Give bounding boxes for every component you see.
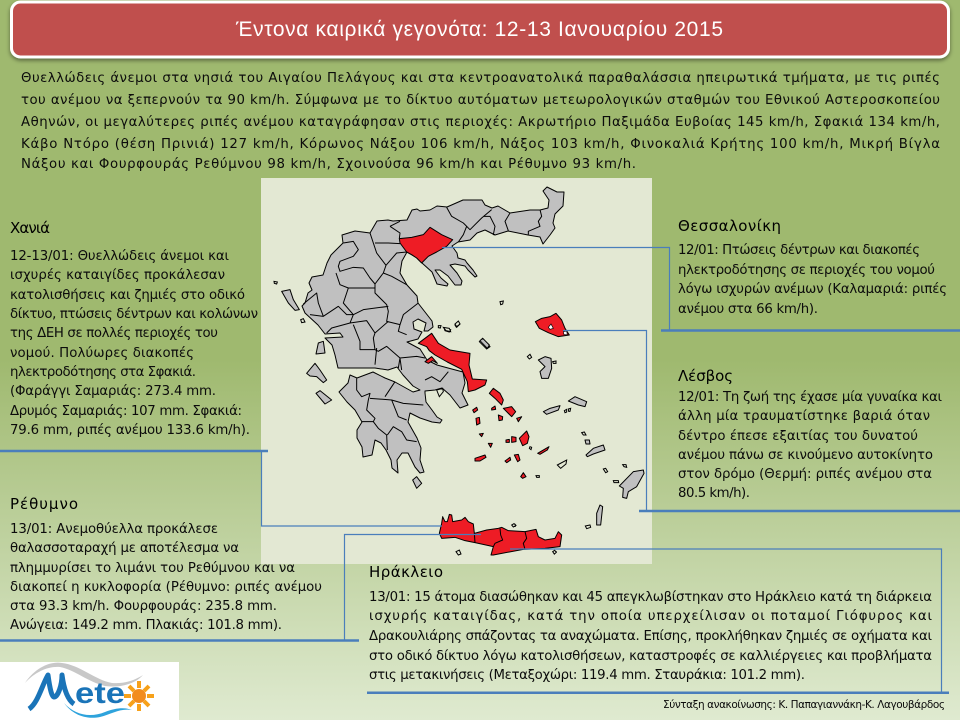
- text block: Chania: Χανιά: [10, 219, 50, 237]
- text block: Chania: δίκτυο, πτώσεις δέντρων και κολώνων: [10, 306, 258, 322]
- text block: Heraklion: Ηράκλειο: [369, 563, 443, 581]
- text block: Thessaloniki: [678, 217, 947, 317]
- map of Greece with affected prefectures in red: [274, 187, 644, 555]
- text block: Lesvos: στον δρόμο (Θερμή: ριπές ανέμου στα: [678, 466, 932, 482]
- prefecture borders north and central: [303, 221, 425, 368]
- map panel background: [261, 178, 652, 564]
- text block: Heraklion: στο οδικό δίκτυο λόγω κατολισθήσεων, καταστροφές σε καλλιέργειες και προβλήματα: [369, 648, 932, 664]
- text block: Thessaloniki: λόγω ισχυρών ανέμων (Καλαμαριά: ριπές: [678, 281, 947, 297]
- connector: Chania: [0, 451, 442, 526]
- text block: Heraklion: στις μετακινήσεις (Μεταξοχώρι: 119.4 mm. Σταυράκια: 101.2 mm).: [369, 667, 805, 683]
- Aegean gray islands: [455, 301, 644, 554]
- connector: Rethymno: [0, 534, 481, 640]
- intro text block: Νάξου και Φουρφουράς Ρεθύμνου 98 km/h, Σχοινούσα 96 km/h και Ρέθυμνο 93 km/h.: [21, 156, 636, 172]
- text block: Chania: της ΔΕΗ σε πολλές περιοχές του: [10, 325, 218, 341]
- Peloponnese borders: [357, 378, 423, 450]
- Crete red: [439, 514, 562, 555]
- title banner: [12, 2, 948, 57]
- text block: Lesvos: άλλη μία τραυματίστηκε βαριά όταν: [678, 408, 930, 424]
- text block: Rethymno: [10, 495, 322, 633]
- white gulfs and small islets: [437, 322, 490, 397]
- Ionian and western islands: [307, 363, 422, 488]
- text block: Rethymno: 13/01: Ανεμοθύελλα προκάλεσε: [10, 521, 218, 537]
- text block: Chania: νομού. Πολύωρες διακοπές: [10, 345, 194, 361]
- credit line: Σύνταξη ανακοίνωσης: Κ. Παπαγιαννάκη-Κ. Λαγουβάρδος: [663, 699, 945, 711]
- text block: Thessaloniki: ηλεκτροδότησης σε περιοχές του νομού: [678, 262, 935, 278]
- intro text block: Αθηνών, οι μεγαλύτερες ριπές ανέμου καταγράφησαν στις περιοχές: Ακρωτήριο Παξιμάδα Ευβοίας 145 km/h, Σφακιά 134 km/h,: [21, 114, 940, 130]
- text block: Rethymno: θαλασσοταραχή με αποτέλεσμα να: [10, 540, 239, 556]
- text block: Thessaloniki: ανέμου στα 66 km/h).: [678, 301, 818, 317]
- title banner: Έντονα καιρικά γεγονότα: 12-13 Ιανουαρίου 2015: [235, 18, 723, 41]
- text block: Lesvos: Λέσβος: [678, 367, 733, 385]
- text block: Rethymno: Ρέθυμνο: [10, 495, 78, 513]
- Evia red: [418, 333, 487, 392]
- connector: Lesvos: [563, 330, 960, 511]
- text block: Heraklion: Δρακουλιάρης σπάζοντας τα αναχώματα. Επίσης, προκλήθηκαν ζημιές σε οχήματα και: [369, 628, 932, 644]
- intro text block: του ανέμου να ξεπερνούν τα 90 km/h. Σύμφωνα με το δίκτυο αυτόματων μετεωρολογικών σταθμών του Εθνικού Αστεροσκοπείου: [21, 92, 940, 108]
- intro text block: Θυελλώδεις άνεμοι στα νησιά του Αιγαίου Πελάγους και στα κεντροανατολικά παραθαλάσσια ηπειρωτικά τμήματα, με τις ριπές: [21, 70, 940, 86]
- text block: Chania: 79.6 mm, ριπές ανέμου 133.6 km/h).: [10, 422, 250, 438]
- text block: Thessaloniki: 12/01: Πτώσεις δέντρων και διακοπές: [678, 242, 920, 258]
- intro text block: [21, 70, 940, 172]
- text block: Chania: Δρυμός Σαμαριάς: 107 mm. Σφακιά:: [10, 403, 242, 419]
- text block: Heraklion: [369, 563, 933, 683]
- logo: Meteo: ete: [75, 677, 125, 710]
- text block: Rethymno: πλημμυρίσει το λιμάνι του Ρεθύμνου και να: [10, 560, 295, 576]
- text block: Lesvos: δέντρο έπεσε εξαιτίας του δυνατού: [678, 428, 918, 444]
- logo: Meteo: [0, 662, 179, 720]
- text block: Rethymno: διακοπεί η κυκλοφορία (Ρέθυμνο: ριπές ανέμου: [10, 579, 322, 595]
- text block: Chania: ισχυρές καταιγίδες προκάλεσαν: [10, 267, 225, 283]
- Cyclades red islands: [473, 388, 549, 478]
- text block: Thessaloniki: Θεσσαλονίκη: [678, 217, 781, 235]
- mainland: [302, 187, 564, 473]
- text block: Lesvos: 12/01: Τη ζωή της έχασε μία γυναίκα και: [678, 389, 942, 405]
- intro text block: Κάβο Ντόρο (θέση Πρινιά) 127 km/h, Κόρωνος Νάξου 106 km/h, Νάξος 103 km/h, Φινοκαλιά Κρήτης 100 km/h, Μικρή Βίγλα: [21, 136, 940, 152]
- text block: Chania: (Φαράγγι Σαμαριάς: 273.4 mm.: [10, 383, 216, 399]
- text block: Lesvos: [678, 367, 942, 501]
- connector: Thessaloniki: [442, 248, 960, 330]
- Thessaloniki red: [399, 227, 453, 263]
- text block: Lesvos: ανέμου πάνω σε κινούμενο αυτοκίνητο: [678, 447, 933, 463]
- text block: Lesvos: 80.5 km/h).: [678, 486, 750, 501]
- connector: Heraklion: [367, 549, 949, 693]
- Lesvos red: [535, 313, 569, 337]
- text block: Rethymno: Ανώγεια: 149.2 mm. Πλακιάς: 101.8 mm).: [10, 617, 282, 633]
- text block: Chania: 12-13/01: Θυελλώδεις άνεμοι και: [10, 248, 230, 264]
- text block: Chania: κατολισθήσεις και ζημιές στο οδικό: [10, 287, 245, 303]
- text block: Heraklion: ισχυρής καταιγίδας, κατά την οποία υπερχείλισαν οι ποταμοί Γιόφυρος και: [369, 608, 933, 624]
- text block: Chania: ηλεκτροδότησης στα Σφακιά.: [10, 364, 196, 380]
- text block: Chania: [10, 219, 258, 438]
- text block: Rethymno: στα 93.3 km/h. Φουρφουράς: 235.8 mm.: [10, 598, 277, 614]
- text block: Heraklion: 13/01: 15 άτομα διασώθηκαν και 45 απεγκλωβίστηκαν στο Ηράκλειο κατά τη διάρκεια: [369, 589, 932, 605]
